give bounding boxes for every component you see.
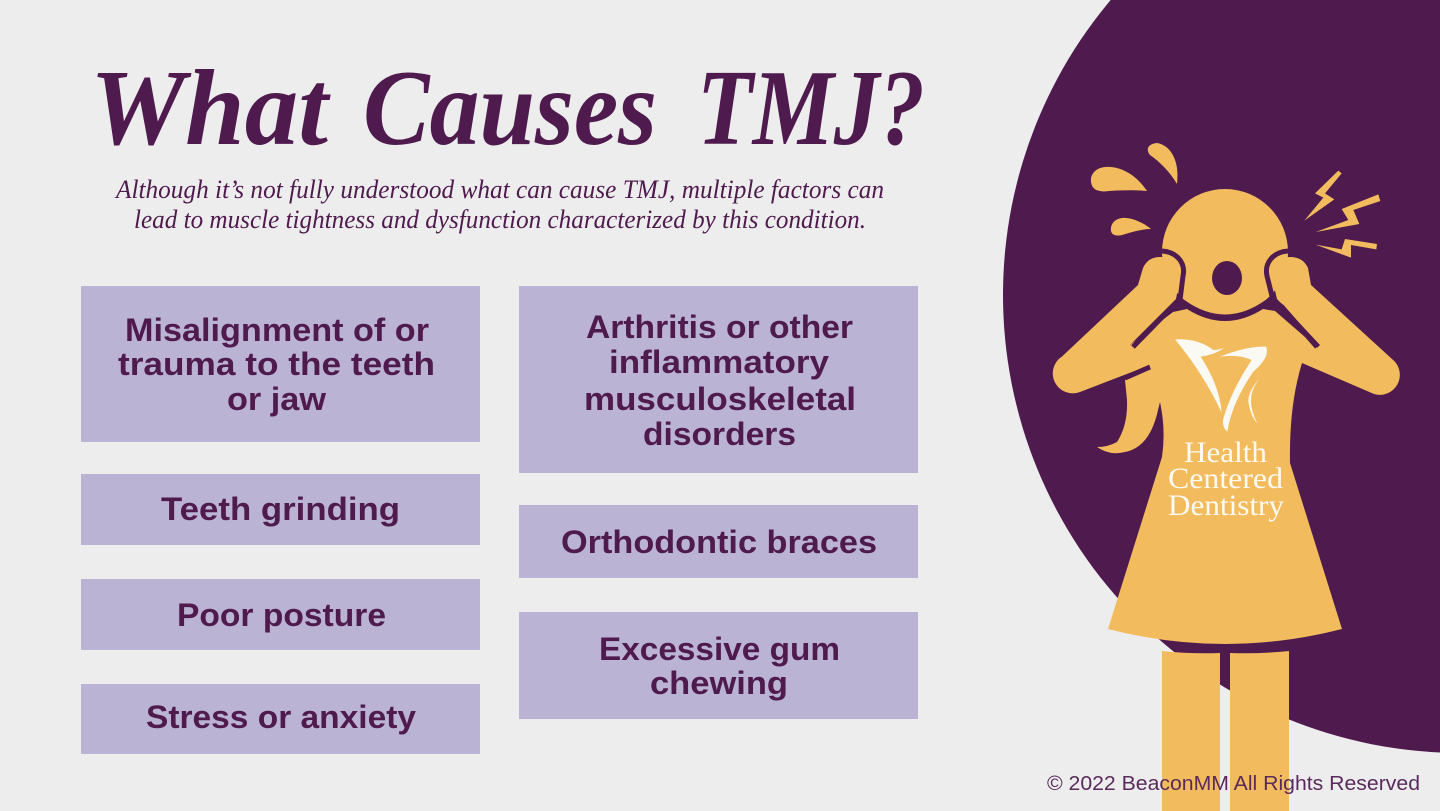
icon: left arm (1053, 257, 1180, 393)
panel: teeth grinding: Teeth grinding (161, 491, 400, 527)
figure: stressed woman (1053, 143, 1400, 811)
background purple circle (1003, 0, 1440, 753)
icon: head (1162, 189, 1288, 315)
logo: Health Centered Dentistry: Dentistry (1168, 489, 1284, 522)
panel: orthodontic braces (519, 505, 918, 578)
panel: orthodontic braces: Orthodontic braces (561, 524, 877, 560)
panel: misalignment (81, 286, 480, 442)
title: TMJ? (697, 49, 925, 168)
panel: arthritis: disorders (643, 416, 796, 452)
panel: misalignment: Misalignment of or (125, 312, 429, 348)
icon: seams around hands and chin (1125, 251, 1317, 378)
panel: excessive gum chewing: Excessive gum (599, 631, 840, 667)
panel: misalignment: or jaw (227, 381, 326, 417)
icon: legs (1162, 651, 1289, 811)
title (90, 49, 925, 168)
icon: right arm (1272, 257, 1400, 395)
panel: excessive gum chewing: chewing (650, 665, 788, 701)
panel: arthritis: inflammatory (609, 344, 829, 380)
panel: teeth grinding (81, 474, 480, 545)
panel: stress or anxiety (81, 684, 480, 754)
icon: dress and hair (1097, 309, 1342, 644)
copyright: © 2022 BeaconMM All Rights Reserved (1047, 773, 1420, 795)
panel: poor posture: Poor posture (177, 597, 386, 633)
panel: misalignment: trauma to the teeth (118, 346, 435, 382)
panel: arthritis: Arthritis or other (586, 309, 853, 345)
logo: Health Centered Dentistry: Health (1184, 436, 1267, 469)
panel: arthritis: musculoskeletal (584, 381, 856, 417)
logo: Health Centered Dentistry: Centered (1168, 462, 1283, 495)
panel: excessive gum chewing (519, 612, 918, 719)
subtitle: lead to muscle tightness and dysfunction characterized by this condition. (134, 205, 866, 234)
subtitle (114, 175, 884, 234)
panel: poor posture (81, 579, 480, 650)
icon: sweat drops (1091, 143, 1178, 236)
panel: arthritis (519, 286, 918, 473)
icon: pain lightning bolts (1304, 171, 1380, 258)
logo: Health Centered Dentistry (1168, 436, 1284, 522)
logo: tooth mark (1175, 339, 1267, 432)
title: What (90, 49, 331, 168)
title: Causes (363, 49, 657, 168)
icon: open mouth (1212, 261, 1242, 295)
panel: stress or anxiety: Stress or anxiety (146, 699, 416, 735)
subtitle: Although it’s not fully understood what can cause TMJ, multiple factors can (114, 175, 884, 204)
